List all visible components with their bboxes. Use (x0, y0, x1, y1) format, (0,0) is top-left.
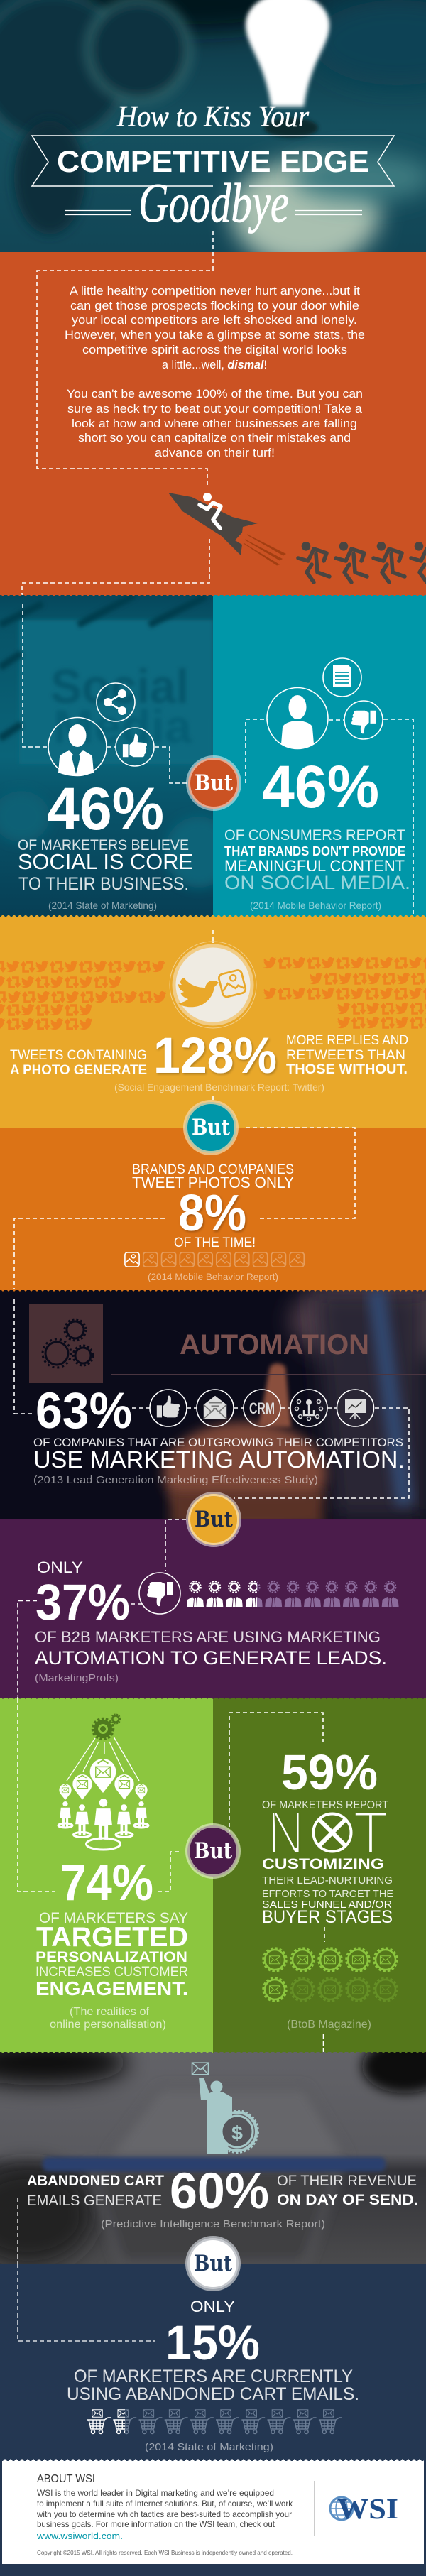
text: about paragraph: business goals. For more information on the WSI team, check out (37, 2519, 275, 2529)
intro paragraph two: You can't be awesome 100% of the time. But you can (67, 387, 363, 400)
text: abandoned cart emails: ABANDONED CART (27, 2173, 164, 2189)
text: tweets containing: TWEETS CONTAINING (10, 1048, 147, 1063)
title line: Competitive Edge: COMPETITIVE EDGE (57, 145, 369, 179)
stat: 60 percent: 60% (170, 2163, 269, 2220)
text: use marketing automation (33, 1436, 405, 1486)
panel: B2B marketers (0, 1289, 426, 1708)
source: state of marketing: (2014 State of Marketing) (145, 2441, 273, 2453)
text: of their revenue: ON DAY OF SEND. (277, 2192, 418, 2208)
text: tweets containing: A PHOTO GENERATE (10, 1063, 147, 1078)
text: customizing: THEIR LEAD-NURTURING (262, 1874, 393, 1887)
text: about paragraph: www.wsiworld.com. (36, 2531, 123, 2541)
stat: 128 percent: 128% (153, 1028, 277, 1084)
decorative twitter bird pattern left (0, 959, 166, 1031)
text: meaningful content: MEANINGFUL CONTENT (224, 857, 405, 875)
text: meaningful content: OF CONSUMERS REPORT (224, 827, 405, 844)
icon: network (290, 1390, 327, 1426)
title line: Goodbye: Goodbye (138, 172, 289, 234)
text: about paragraph: WSI is the world leader in Digital marketing and we’re equipped (37, 2488, 274, 2498)
text: tweets containing (10, 1048, 147, 1078)
But badge: social (188, 758, 239, 809)
icon: businessman with envelope and dollar gear (192, 2063, 258, 2154)
text: meaningful content: THAT BRANDS DON'T PROVIDE (224, 844, 405, 858)
text: of the time: OF THE TIME! (174, 1235, 256, 1250)
stat: 74 percent: 74% (60, 1855, 153, 1911)
text: more replies: RETWEETS THAN (286, 1048, 405, 1063)
intro paragraph one: A little healthy competition never hurt anyone...but it (70, 284, 360, 298)
text: brands and companies: TWEET PHOTOS ONLY (132, 1174, 294, 1191)
source: realities of personalisation: (The realities of (70, 2006, 150, 2018)
source: mobile behavior report: (2014 Mobile Behavior Report) (148, 1271, 278, 1282)
panel: social media left: Media (53, 700, 192, 753)
logo: WSI globe: WSI (337, 2492, 398, 2525)
intro paragraph two: look at how and where other businesses are falling (72, 417, 357, 430)
panel: brands tweet photos (0, 1128, 426, 1299)
intro paragraph two (67, 387, 363, 459)
text: about paragraph: to implement a full suite of Internet solutions. But, of course, we’ll work (37, 2499, 293, 2509)
text: marketers using: OF MARKETERS ARE CURRENTLY (74, 2367, 353, 2386)
But badge: cart (187, 2238, 239, 2289)
panel: intro (0, 231, 426, 604)
icon: CRM: CRM (249, 1399, 275, 1417)
icon: glowing light bulb (246, 0, 329, 107)
icon: envelope (197, 1390, 234, 1426)
panel: social media left: Social (50, 660, 189, 714)
panel: twitter photos stat (0, 915, 426, 1128)
icon: gears with email pins and people (58, 1714, 148, 1850)
text: abandoned cart emails (27, 2173, 164, 2209)
text: only: ONLY (190, 2298, 235, 2315)
text: customizing: CUSTOMIZING (262, 1856, 384, 1872)
text: social is core (18, 837, 193, 911)
intro paragraph one: However, when you take a glimpse at some stats, the (65, 328, 365, 342)
text: meaningful content (224, 827, 410, 911)
text: meaningful content: ON SOCIAL MEDIA. (224, 872, 410, 893)
text: targeted personalization: PERSONALIZATION (36, 1949, 187, 1965)
icon: thumbs up in circle (116, 728, 154, 766)
stat: 37 percent: 37% (36, 1575, 130, 1631)
text: targeted personalization (36, 1910, 188, 1999)
But badge: personalization (187, 1825, 239, 1877)
scalloped edges between green and photo (0, 2051, 426, 2053)
intro paragraph one: a little...well, dismal! (162, 358, 267, 371)
stat: 63 percent: 63% (36, 1383, 132, 1439)
But badge: tweets (185, 1096, 236, 1153)
text: only: ONLY (37, 1559, 83, 1576)
icon row: one in ten photos (125, 1252, 304, 1267)
intro paragraph one: can get those prospects flocking to your door while (70, 299, 359, 312)
panel: social media left (0, 595, 233, 917)
icon: thumbs up (150, 1390, 187, 1426)
text: of marketers report: OF MARKETERS REPORT (262, 1799, 388, 1811)
text: brands and companies: BRANDS AND COMPANIES (132, 1162, 294, 1177)
text: social is core: TO THEIR BUSINESS. (18, 874, 189, 894)
source: predictive intelligence: (Predictive Intelligence Benchmark Report) (101, 2218, 325, 2230)
text: of their revenue (277, 2173, 418, 2208)
panel: social media right (213, 595, 426, 942)
text: targeted personalization: TARGETED (36, 1922, 188, 1953)
text: copyright: Copyright ©2015 WSI. All rights reserved. Each WSI Business is independently owned and operated. (37, 2549, 293, 2556)
intro paragraph two: short so you can capitalize on their mistakes and (78, 431, 351, 444)
icon: document in circle (323, 658, 361, 697)
panel: not customizing (213, 1696, 426, 2138)
icon grid: gears with envelopes (263, 1948, 397, 2001)
icon: bird with photo in circle (170, 942, 256, 1028)
source: BtoB magazine: (BtoB Magazine) (287, 2019, 371, 2031)
panel: abandoned cart photo (0, 2052, 426, 2264)
text: brands and companies (132, 1162, 294, 1191)
icon row: people with gears (187, 1581, 399, 1607)
icon: CRM (244, 1390, 280, 1426)
icon row: shopping carts (87, 2410, 342, 2434)
title (32, 101, 394, 234)
text: B2B marketers: OF B2B MARKETERS ARE USING MARKETING (35, 1628, 381, 1646)
text: NOT with cross (268, 1799, 388, 1866)
icon: thumbs down in circle (344, 701, 383, 739)
hero photo background with glowing light bulbs (0, 0, 426, 266)
decorative twitter bird pattern right (263, 956, 426, 1030)
intro paragraph one (65, 284, 365, 371)
intro paragraph one: your local competitors are left shocked and lonely. (72, 313, 357, 327)
photo text: automation: AUTOMATION (180, 1329, 369, 1360)
icon: presentation board (337, 1390, 373, 1426)
intro paragraph two: advance on their turf! (155, 446, 275, 459)
text: about paragraph: with you to determine which tactics are best-suited to accomplish your (36, 2509, 292, 2519)
text: use marketing automation: OF COMPANIES THAT ARE OUTGROWING THEIR COMPETITORS (33, 1436, 403, 1449)
panel: about WSI (2, 2459, 424, 2564)
heading: about WSI: ABOUT WSI (37, 2473, 95, 2485)
But badge: tweets: But (192, 1115, 231, 1140)
text: marketers using (67, 2367, 359, 2404)
title line: How to Kiss Your: How to Kiss Your (116, 101, 310, 133)
source: realities of personalisation: online personalisation) (50, 2019, 166, 2031)
text: targeted personalization: OF MARKETERS SAY (39, 1910, 188, 1926)
text: B2B marketers (35, 1628, 387, 1684)
stat: 8 percent: 8% (178, 1185, 246, 1242)
panel: abandoned cart emails usage (0, 2264, 426, 2576)
icon: rocket with rider (168, 493, 285, 565)
panel: marketing automation photo (0, 1278, 426, 1527)
stat: 46 percent marketers: 46% (47, 775, 164, 842)
photo card with gears (29, 1304, 103, 1383)
text: more replies: MORE REPLIES AND (286, 1033, 408, 1048)
stat: 15 percent: 15% (165, 2315, 260, 2370)
panel: targeted personalization (0, 1696, 426, 2052)
text: customizing (262, 1856, 393, 1927)
text: social is core: SOCIAL IS CORE (18, 849, 193, 874)
text: targeted personalization: INCREASES CUSTOMER (36, 1965, 188, 1980)
stat: 59 percent: 59% (281, 1745, 378, 1800)
text: of their revenue: OF THEIR REVENUE (277, 2173, 417, 2189)
text: abandoned cart emails: EMAILS GENERATE (27, 2193, 162, 2209)
But badge: automation (188, 1494, 239, 1545)
icon: businessman with envelope and dollar gear: $ (231, 2122, 243, 2144)
text: customizing: SALES FUNNEL AND/OR (262, 1899, 392, 1911)
text: about paragraph (36, 2488, 293, 2541)
text: more replies: THOSE WITHOUT. (286, 1062, 408, 1077)
text: customizing: EFFORTS TO TARGET THE (262, 1888, 393, 1900)
text: targeted personalization: ENGAGEMENT. (36, 1977, 188, 1999)
icon: share in circle (97, 683, 135, 721)
icon: person in circle (267, 687, 328, 748)
icon: four running figures (298, 542, 426, 582)
intro paragraph one: competitive spirit across the digital world looks (82, 343, 347, 356)
text: use marketing automation: (2013 Lead Generation Marketing Effectiveness Study) (33, 1474, 318, 1486)
text: more replies (286, 1033, 408, 1077)
icon: suited person in circle (48, 717, 106, 776)
text: NOT with cross: T (353, 1799, 388, 1866)
text: B2B marketers: (MarketingProfs) (35, 1672, 119, 1684)
But badge: personalization: But (194, 1838, 233, 1864)
stat: 46 percent consumers: 46% (262, 753, 379, 820)
source: realities of personalisation (50, 2006, 166, 2031)
intro paragraph two: sure as heck try to beat out your competition! Take a (67, 402, 363, 415)
text: customizing: BUYER STAGES (262, 1907, 393, 1927)
icon: thumbs down in circle (139, 1573, 180, 1614)
But badge: cart: But (194, 2251, 233, 2276)
But badge: social: But (195, 770, 234, 796)
But badge: automation: But (195, 1507, 234, 1532)
ribbon outline (32, 136, 394, 186)
text: social is core: OF MARKETERS BELIEVE (18, 837, 189, 853)
text: B2B marketers: AUTOMATION TO GENERATE LEADS. (35, 1647, 387, 1669)
source: social engagement report: (Social Engagement Benchmark Report: Twitter) (114, 1081, 324, 1093)
text: social is core: (2014 State of Marketing) (48, 900, 157, 911)
text: marketers using: USING ABANDONED CART EMAILS. (67, 2384, 359, 2404)
text: use marketing automation: USE MARKETING AUTOMATION. (33, 1446, 405, 1473)
text: meaningful content: (2014 Mobile Behavior Report) (250, 900, 381, 911)
text: NOT with cross: N (268, 1799, 304, 1866)
